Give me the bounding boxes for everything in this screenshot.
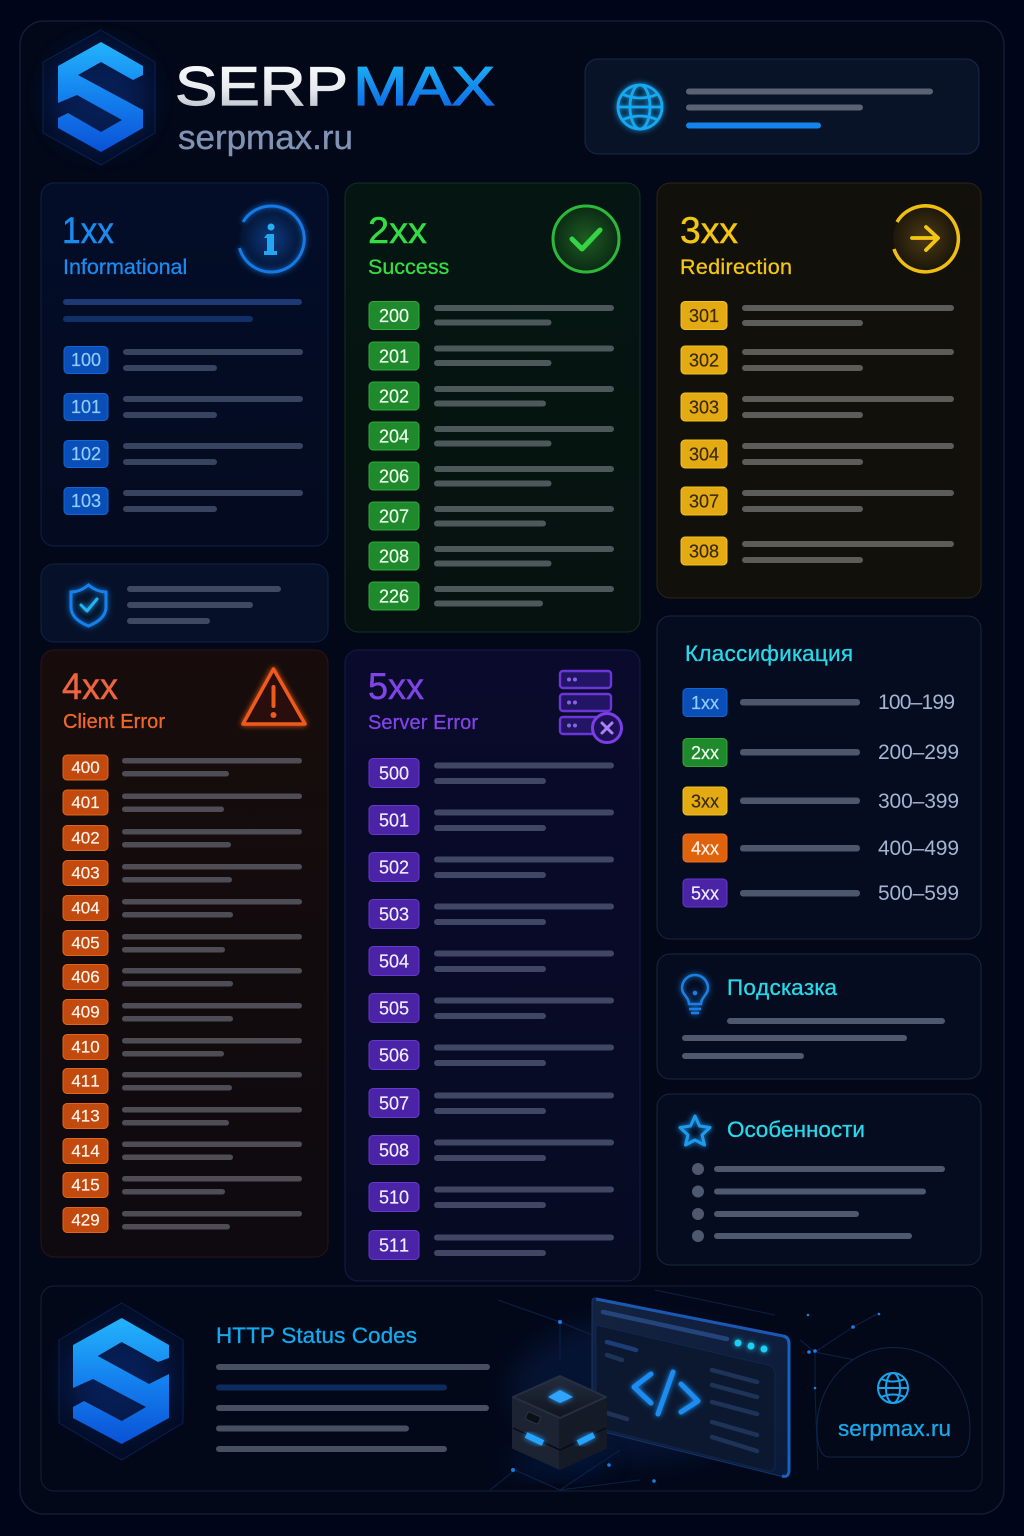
row: 3xx range: [683, 787, 959, 815]
row: 2xx range: [683, 738, 959, 766]
heading: Подсказка: Подсказка: [727, 975, 837, 1000]
row: 411: 411: [71, 1072, 100, 1090]
row: 503: [369, 900, 614, 928]
panel: features: [657, 1094, 981, 1265]
row: 206: 206: [379, 466, 409, 486]
heading: 5xx: 5xx: [368, 666, 424, 707]
row: 405: 405: [71, 934, 100, 952]
row: 401: 401: [71, 793, 100, 812]
row: 404: [63, 896, 302, 920]
row: 506: 506: [379, 1046, 409, 1066]
icon: server error: [560, 671, 622, 742]
site name: serpmax.ru: [178, 119, 353, 157]
row: 303: [681, 393, 954, 421]
row: 101: 101: [71, 397, 101, 417]
row: 505: 505: [379, 998, 409, 1018]
row: 402: [63, 826, 302, 850]
row: 500: [369, 758, 614, 788]
subheading: Informational: Informational: [63, 255, 187, 279]
row: 304: [681, 440, 954, 468]
row: 411: [63, 1068, 302, 1094]
subheading: Server Error: Server Error: [368, 712, 478, 734]
row: 1xx range: 100–199: [878, 691, 955, 714]
heading: Особенности: Особенности: [727, 1117, 865, 1142]
row: 4xx range: 400–499: [878, 837, 959, 860]
row: 302: [681, 346, 954, 374]
row: 400: [63, 755, 302, 780]
row: 405: [63, 930, 302, 956]
panel: 3xx redirection: [657, 183, 981, 598]
row: 301: [681, 302, 954, 330]
row: 406: [63, 964, 302, 990]
heading: 2xx: 2xx: [368, 210, 428, 251]
icon: code tag: [634, 1372, 698, 1414]
row: 1xx range: 1xx: [691, 693, 719, 713]
row: 501: 501: [379, 810, 409, 830]
row: 400: 400: [71, 758, 100, 777]
row: 2xx range: 2xx: [691, 743, 719, 763]
row: 501: [369, 806, 614, 834]
row: 1xx range: [683, 688, 955, 716]
row: 226: [369, 582, 614, 610]
row: 511: [369, 1230, 614, 1260]
row: 409: [63, 1000, 302, 1024]
row: 200: [369, 302, 614, 330]
icon: globe: [618, 85, 662, 129]
site name: serpmax.ru: [838, 1416, 951, 1441]
row: 201: [369, 342, 614, 370]
wordmark SERPMAX: MAX: [353, 55, 495, 117]
row: 5xx range: [683, 879, 959, 907]
row: 202: [369, 382, 614, 410]
icon: shield: [71, 585, 106, 626]
row: 401: [63, 790, 302, 815]
panel: 1xx informational: [41, 183, 328, 546]
row: 100: 100: [71, 350, 101, 370]
row: 208: [369, 542, 614, 570]
row: 308: 308: [689, 542, 719, 562]
wordmark SERPMAX: SERP: [175, 55, 348, 117]
panel: 5xx server error: [345, 650, 640, 1281]
row: 102: [64, 440, 303, 468]
row: 413: [63, 1104, 302, 1128]
row: 510: [369, 1182, 614, 1212]
illustration: browser window: [592, 1298, 789, 1476]
icon: warning triangle: [243, 669, 305, 724]
row: 103: 103: [71, 491, 101, 511]
row: 413: 413: [71, 1106, 100, 1126]
row: 204: 204: [379, 426, 409, 446]
row: 504: [369, 946, 614, 976]
row: 103: [64, 488, 303, 514]
network background lines: [490, 1290, 879, 1490]
row: 403: 403: [71, 864, 100, 882]
row: 508: [369, 1136, 614, 1164]
panel: classification: [657, 616, 981, 939]
text lines: [216, 1364, 490, 1452]
row: 307: [681, 487, 954, 515]
icon: check: [553, 206, 619, 272]
row: 429: [63, 1208, 302, 1232]
row: 207: [369, 502, 614, 530]
row: 226: 226: [379, 586, 409, 606]
panel: shield note: [41, 564, 328, 642]
row: 102: 102: [71, 444, 101, 464]
row: 2xx range: 200–299: [878, 741, 959, 764]
logo: footer hexagon S: [59, 1303, 183, 1460]
row: 101: [64, 394, 303, 420]
row: 202: 202: [379, 386, 409, 406]
row: 204: [369, 422, 614, 450]
icon: info: [240, 206, 304, 272]
row: 402: 402: [71, 828, 100, 848]
row: 208: 208: [379, 546, 409, 566]
row: 206: [369, 462, 614, 490]
icon: arrow circle: [893, 206, 958, 272]
row: 500: 500: [379, 764, 409, 784]
row: 506: [369, 1040, 614, 1070]
row: 504: 504: [379, 952, 409, 972]
row: 502: 502: [379, 858, 409, 878]
illustration: cube: [510, 1376, 610, 1472]
wordmark SERPMAX: [175, 55, 495, 117]
row: 200: 200: [379, 306, 409, 326]
heading: HTTP Status Codes: HTTP Status Codes: [216, 1323, 417, 1348]
row: 201: 201: [379, 346, 409, 366]
heading: 3xx: 3xx: [680, 210, 739, 251]
heading: 4xx: 4xx: [62, 666, 118, 707]
row: 414: [63, 1138, 302, 1164]
row: 403: [63, 860, 302, 886]
row: 404: 404: [71, 898, 100, 918]
row: 410: [63, 1034, 302, 1060]
heading: 1xx: 1xx: [62, 210, 114, 251]
row: 4xx range: [683, 834, 959, 862]
logo: hexagon S: [43, 30, 155, 165]
panel: top info: [585, 59, 979, 154]
row: 414: 414: [71, 1142, 100, 1160]
row: 508: 508: [379, 1140, 409, 1160]
row: 3xx range: 300–399: [878, 790, 959, 813]
row: 301: 301: [689, 306, 719, 326]
row: 100: [64, 346, 303, 374]
icon: light bulb: [682, 975, 708, 1013]
glow behind illustration: [510, 1320, 770, 1460]
row: 410: 410: [71, 1038, 100, 1056]
row: 409: 409: [71, 1002, 100, 1022]
row: 415: [63, 1172, 302, 1198]
row: 307: 307: [689, 492, 719, 512]
badge: site link: [817, 1347, 970, 1457]
panel: 2xx success: [345, 183, 640, 632]
heading: Классификация: Классификация: [685, 641, 853, 666]
row: 511: 511: [379, 1236, 409, 1256]
row: 429: 429: [71, 1210, 100, 1230]
row: 303: 303: [689, 398, 719, 418]
row: 304: 304: [689, 444, 719, 464]
row: 503: 503: [379, 904, 409, 924]
row: 502: [369, 852, 614, 882]
row: 3xx range: 3xx: [691, 792, 719, 812]
panel: hint: [657, 954, 981, 1079]
row: 5xx range: 500–599: [878, 882, 959, 905]
row: 505: [369, 994, 614, 1022]
row: 302: 302: [689, 350, 719, 370]
row: 510: 510: [379, 1188, 409, 1208]
subheading: Success: Success: [368, 255, 449, 279]
panel: 4xx client error: [41, 650, 328, 1257]
row: 406: 406: [71, 968, 100, 986]
network nodes: [511, 1313, 880, 1483]
icon: globe: [878, 1373, 908, 1403]
row: 207: 207: [379, 506, 409, 526]
row: 5xx range: 5xx: [691, 884, 719, 904]
row: 507: 507: [379, 1094, 409, 1114]
row: 507: [369, 1088, 614, 1118]
icon: star: [680, 1116, 710, 1145]
row: 308: [681, 537, 954, 565]
panel: footer: [41, 1286, 982, 1491]
subheading: Client Error: Client Error: [63, 711, 165, 733]
subheading: Redirection: Redirection: [680, 255, 792, 279]
row: 415: 415: [71, 1176, 100, 1194]
row: 4xx range: 4xx: [691, 838, 719, 858]
